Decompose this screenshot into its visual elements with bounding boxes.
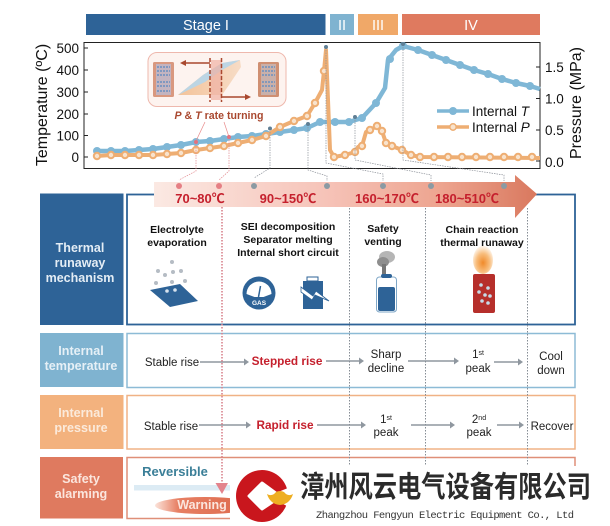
warning band [155, 497, 255, 514]
temperature flow text: down [537, 365, 565, 377]
label: safety alarming: alarming [55, 487, 107, 501]
temperature ranges [175, 191, 499, 206]
pressure flow text [144, 414, 574, 439]
warning band: Warning [177, 498, 227, 512]
right battery [258, 62, 279, 97]
left axis: 500 [56, 41, 79, 56]
panel: internal temperature [40, 333, 575, 388]
stage IV: IV [464, 18, 478, 34]
left axis title: Temperature (ºC) [34, 44, 51, 166]
stage II [330, 14, 354, 35]
pressure flow text: st [386, 415, 392, 422]
stage bar [86, 14, 540, 35]
left axis: 400 [56, 63, 79, 78]
right axis: 0.5 [545, 123, 564, 138]
left battery [153, 62, 174, 97]
flow arrows [199, 358, 524, 428]
arrow stage dots [176, 183, 507, 189]
temperature flow text: peak [466, 363, 491, 375]
line chart [34, 41, 585, 170]
temperature flow text: Sharp [371, 349, 401, 361]
pressure flow text: peak [467, 427, 492, 439]
pressure flow text: Recover [531, 421, 574, 433]
left axis: 200 [56, 107, 79, 122]
chart markers [268, 42, 405, 130]
label: thermal runaway mechanism [40, 194, 124, 325]
legend: Internal P [472, 120, 530, 135]
temperature ranges: 70~80℃ [175, 191, 225, 206]
mechanism: chain reaction: thermal runaway [440, 237, 524, 249]
stage III: III [372, 18, 384, 34]
pressure flow text: Rapid rise [256, 418, 314, 432]
stage divider lines [222, 207, 528, 486]
label: internal pressure: pressure [54, 421, 108, 435]
label: internal temperature: temperature [45, 359, 117, 373]
mechanism: SEI decomposition: Internal short circuit [237, 247, 339, 259]
label: internal temperature: Internal [58, 344, 104, 358]
pressure flow text: 1 [380, 414, 392, 426]
watermark logo [230, 464, 610, 526]
mechanism: SEI decomposition [237, 221, 339, 310]
right axis: 0.0 [545, 155, 564, 170]
left axis: 300 [56, 85, 79, 100]
legend [437, 104, 531, 135]
temperature ranges: 90~150℃ [260, 191, 316, 206]
stage I [86, 14, 326, 35]
pressure flow text: nd [478, 415, 486, 422]
pressure flow text: Stable rise [144, 421, 198, 433]
mechanism: chain reaction [440, 224, 524, 313]
panel: safety alarming [40, 457, 575, 518]
label: thermal runaway mechanism: runaway [55, 256, 105, 270]
icon: company logo [236, 470, 293, 522]
label: safety alarming: Safety [62, 472, 100, 486]
mechanism: electrolyte evaporation [147, 224, 207, 307]
left axis: 0 [71, 150, 79, 165]
reversible label: Reversible [142, 464, 208, 479]
temperature progression arrow [154, 175, 537, 218]
mechanism: chain reaction: Chain reaction [446, 224, 518, 236]
red divider arrowhead [216, 483, 228, 494]
label: safety alarming [40, 457, 123, 518]
mechanism: safety venting [364, 223, 402, 312]
label: internal pressure [40, 395, 124, 449]
mechanism: safety venting: Safety [367, 223, 399, 235]
series: internal P [94, 50, 540, 160]
temperature flow text: decline [368, 363, 404, 375]
right axis: 1.0 [545, 92, 564, 106]
inset: P and T rate turning [148, 52, 286, 144]
right axis: 1.5 [545, 60, 564, 75]
label: internal temperature [40, 333, 124, 387]
right axis [536, 60, 564, 170]
series: internal T [93, 42, 540, 155]
mechanism: safety venting: venting [364, 236, 402, 248]
panel: thermal runaway mechanism [40, 194, 575, 325]
mechanism: SEI decomposition: SEI decomposition [241, 221, 335, 233]
icon: short circuit battery [301, 277, 329, 309]
temperature flow text: 1 [472, 349, 484, 361]
stage III [358, 14, 398, 35]
pressure flow text: 2 [472, 414, 486, 426]
panel: internal pressure [40, 395, 575, 449]
connectors from chart to arrow [179, 47, 504, 181]
reversible band [134, 485, 230, 490]
label: thermal runaway mechanism: Thermal [56, 241, 104, 255]
mechanism: electrolyte evaporation: Electrolyte [150, 224, 204, 236]
label: thermal runaway mechanism: mechanism [46, 271, 114, 285]
temperature ranges: 160~170℃ [355, 191, 419, 206]
stage II: II [338, 18, 346, 34]
icon: gas gauge: GAS [252, 300, 267, 307]
temperature flow text: st [478, 350, 484, 357]
temperature flow text: Stepped rise [252, 354, 323, 368]
stage IV [402, 14, 540, 35]
label: internal pressure: Internal [58, 406, 104, 420]
temperature flow text: Stable rise [145, 357, 199, 369]
icon: evaporation [150, 260, 198, 307]
left axis [56, 41, 88, 165]
temperature flow text [145, 349, 565, 377]
pressure flow text: peak [374, 427, 399, 439]
icon: burning cell [473, 246, 495, 313]
right axis title: Pressure (MPa) [568, 47, 585, 159]
inset arrows [180, 58, 251, 102]
temperature ranges: 180~510℃ [435, 191, 499, 206]
mechanism: SEI decomposition: Separator melting [243, 234, 333, 246]
left axis: 100 [56, 128, 79, 144]
temperature flow text: Cool [539, 351, 563, 363]
legend: Internal T [472, 104, 531, 119]
company English name: Zhangzhou Fengyun Electric Equipment Co., Ltd [316, 510, 574, 522]
icon: venting cell [376, 251, 396, 312]
inset caption: P & T rate turning [175, 110, 263, 122]
mechanism: electrolyte evaporation: evaporation [147, 237, 207, 249]
stage I: Stage I [183, 18, 229, 34]
